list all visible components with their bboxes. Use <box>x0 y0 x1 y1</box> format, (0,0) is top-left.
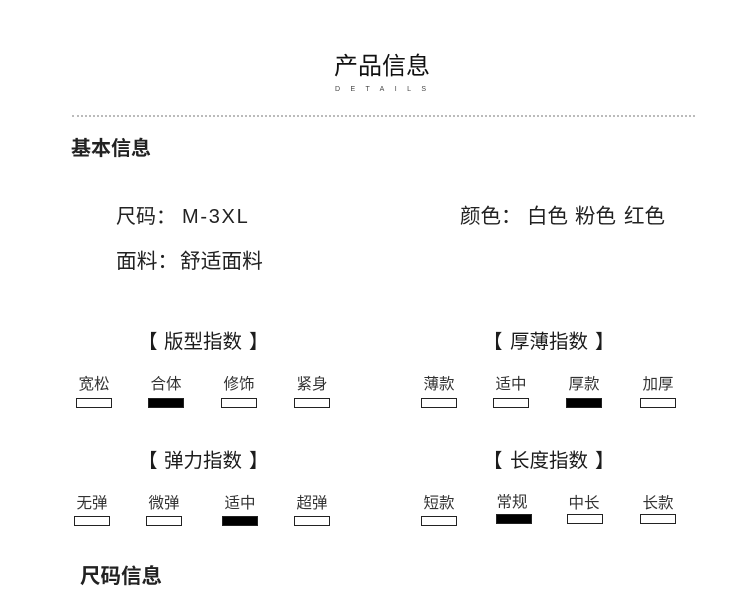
heading: elasticity index: 【 <box>138 450 158 472</box>
heading: thickness index <box>483 331 615 353</box>
option: 修饰: 修饰 <box>223 376 254 392</box>
dotted divider <box>72 115 695 117</box>
option: 适中 (selected): 适中 <box>224 494 256 512</box>
option: 无弹 <box>74 494 110 526</box>
option: 适中 (selected) <box>222 494 258 526</box>
option: 微弹 <box>146 494 182 526</box>
option: 厚款 (selected) <box>566 376 602 408</box>
option: 加厚 <box>640 376 676 408</box>
panel: basic info <box>116 205 665 273</box>
option: 紧身 <box>294 376 330 408</box>
heading: fit index <box>138 331 269 353</box>
option: 薄款 <box>421 376 457 408</box>
colour field: 颜色： <box>460 205 522 228</box>
option: 宽松 <box>76 376 112 408</box>
size field: 尺码： <box>116 206 176 228</box>
heading: fit index: 】 <box>249 331 269 353</box>
heading: fit index: 版型指数 <box>164 331 242 353</box>
option: 长款: 长款 <box>642 494 674 512</box>
option: 紧身: 紧身 <box>296 376 328 392</box>
colour field: 红色 <box>624 205 665 228</box>
heading: elasticity index <box>138 450 269 472</box>
title block <box>334 53 436 93</box>
option: 超弹 <box>294 494 330 526</box>
option: 短款 <box>421 494 457 526</box>
option: 厚款 (selected): 厚款 <box>568 376 600 392</box>
option: 加厚: 加厚 <box>642 376 674 392</box>
heading: thickness index: 【 <box>483 331 503 353</box>
heading: length index: 【 <box>483 450 503 472</box>
heading: elasticity index: 弹力指数 <box>164 450 242 472</box>
fabric field <box>116 250 263 273</box>
heading: length index <box>483 450 615 472</box>
option: 常规 (selected) <box>496 494 532 524</box>
size field <box>116 206 249 228</box>
option: 适中 <box>493 376 529 408</box>
heading: size info: 尺码信息 <box>80 565 162 588</box>
option: 超弹: 超弹 <box>296 494 328 512</box>
panel: length index <box>421 450 676 526</box>
subtitle: DETAILS: DETAILS <box>335 86 436 93</box>
option: 适中: 适中 <box>495 376 526 392</box>
heading: basic info: 基本信息 <box>71 138 151 160</box>
fabric field: 面料： <box>116 250 178 273</box>
heading: length index: 】 <box>595 450 615 472</box>
colour field <box>460 205 665 228</box>
colour field: 白色 <box>527 205 568 228</box>
panel: elasticity index <box>74 450 330 526</box>
heading: elasticity index: 】 <box>249 450 269 472</box>
option: 修饰 <box>221 376 257 408</box>
heading: thickness index: 】 <box>595 331 615 353</box>
option: 微弹: 微弹 <box>148 494 180 512</box>
heading: fit index: 【 <box>138 331 158 353</box>
option: 中长: 中长 <box>568 494 600 512</box>
option: 中长 <box>567 494 603 524</box>
option: 短款: 短款 <box>423 494 454 512</box>
option: 合体 (selected) <box>148 376 184 408</box>
colour field: 粉色 <box>575 205 616 228</box>
heading: thickness index: 厚薄指数 <box>510 331 588 353</box>
panel: fit index <box>76 331 330 408</box>
panel: thickness index <box>421 331 676 408</box>
option: 薄款: 薄款 <box>423 376 454 392</box>
title: 产品信息: 产品信息 <box>334 53 430 80</box>
option: 合体 (selected): 合体 <box>150 376 182 392</box>
option: 宽松: 宽松 <box>78 376 110 392</box>
option: 长款 <box>640 494 676 524</box>
size field: M-3XL <box>182 206 249 228</box>
heading: length index: 长度指数 <box>510 450 588 472</box>
option: 无弹: 无弹 <box>76 494 108 512</box>
fabric field: 舒适面料 <box>180 250 263 273</box>
option: 常规 (selected): 常规 <box>496 494 528 510</box>
